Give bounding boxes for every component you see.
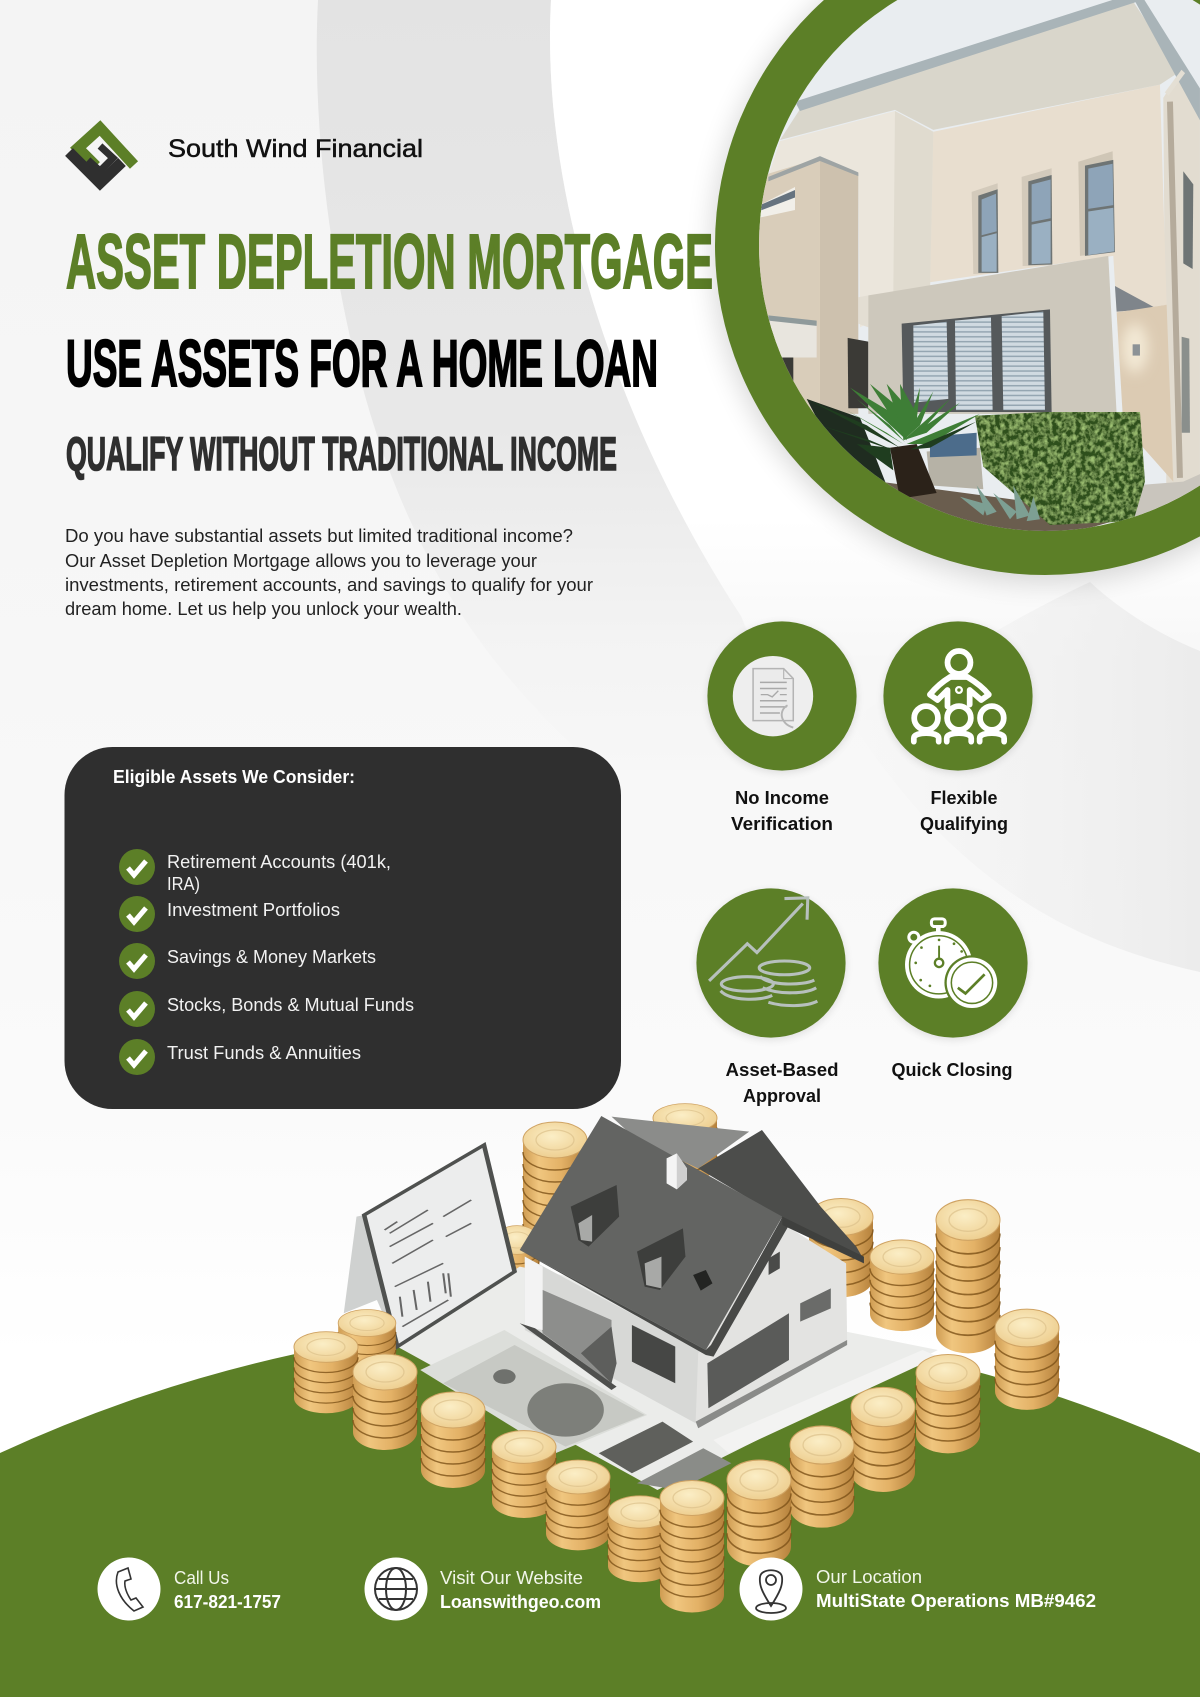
contact: phone: Call Us — [174, 1568, 229, 1588]
contact: website: Loanswithgeo.com — [440, 1592, 601, 1612]
label — [731, 787, 833, 834]
intro paragraph: Do you have substantial assets but limited traditional income? — [65, 526, 573, 546]
icon: phone handset — [116, 1568, 143, 1611]
feature: no income verification — [707, 621, 857, 834]
contact: location: Our Location — [816, 1567, 922, 1587]
icon: group of people — [914, 651, 1004, 742]
label: Asset-Based — [726, 1059, 838, 1080]
brand name: South Wind Financial — [168, 135, 423, 163]
contact: location: MultiState Operations MB#9462 — [816, 1591, 1096, 1611]
icon: globe — [375, 1568, 417, 1610]
contact: location — [740, 1558, 1096, 1620]
logo: South Wind Financial — [69, 128, 423, 183]
feature: quick closing — [878, 888, 1028, 1080]
intro paragraph: dream home. Let us help you unlock your wealth. — [65, 599, 462, 619]
label: Approval — [743, 1085, 821, 1106]
subtitle: USE ASSETS FOR A HOME LOAN — [66, 326, 658, 400]
list item: stocks — [119, 991, 414, 1027]
label: Qualifying — [920, 813, 1008, 834]
icon: logo mark — [69, 128, 134, 183]
icon: document — [733, 656, 813, 736]
list item: retirement accounts: Retirement Accounts (401k, — [167, 852, 391, 872]
list item: trust funds — [119, 1039, 361, 1075]
list item: retirement accounts: IRA) — [167, 874, 200, 894]
label — [726, 1059, 838, 1106]
list item: retirement accounts — [119, 849, 391, 894]
contact: phone: 617-821-1757 — [174, 1592, 281, 1612]
list item: investment portfolios — [119, 896, 340, 932]
intro paragraph: investments, retirement accounts, and savings to qualify for your — [65, 575, 593, 595]
coins behind the house — [495, 1104, 1059, 1410]
list item: trust funds: Trust Funds & Annuities — [167, 1043, 361, 1063]
label: Quick Closing — [892, 1059, 1012, 1080]
contact: phone — [98, 1558, 281, 1620]
intro paragraph: Our Asset Depletion Mortgage allows you to leverage your — [65, 551, 537, 571]
list item: savings — [119, 943, 376, 979]
coins in front — [294, 1310, 980, 1612]
panel: eligible assets — [64, 747, 621, 1109]
label: Flexible — [930, 787, 998, 808]
label: No Income — [735, 787, 829, 808]
feature: flexible qualifying — [883, 621, 1033, 834]
icon: map pin — [756, 1570, 786, 1613]
list item: savings: Savings & Money Markets — [167, 947, 376, 967]
model house on documents — [344, 1116, 938, 1490]
photo of modern house in green ring — [713, 0, 1200, 582]
contact: website — [364, 1558, 601, 1620]
icon: growth chart and coins — [709, 898, 817, 1006]
illustration: house with coin stacks — [294, 1104, 1059, 1612]
tagline: QUALIFY WITHOUT TRADITIONAL INCOME — [66, 427, 617, 480]
icon: stopwatch with check — [905, 919, 1000, 1010]
panel heading: Eligible Assets We Consider: — [113, 767, 355, 787]
list item: stocks: Stocks, Bonds & Mutual Funds — [167, 995, 414, 1015]
label — [920, 787, 1008, 834]
intro paragraph — [65, 526, 593, 619]
contact: website: Visit Our Website — [440, 1568, 583, 1588]
list item: investment portfolios: Investment Portfolios — [167, 900, 340, 920]
feature: asset-based approval — [696, 888, 846, 1106]
label: Verification — [731, 813, 833, 834]
green hill footer shape — [0, 1321, 1200, 1697]
